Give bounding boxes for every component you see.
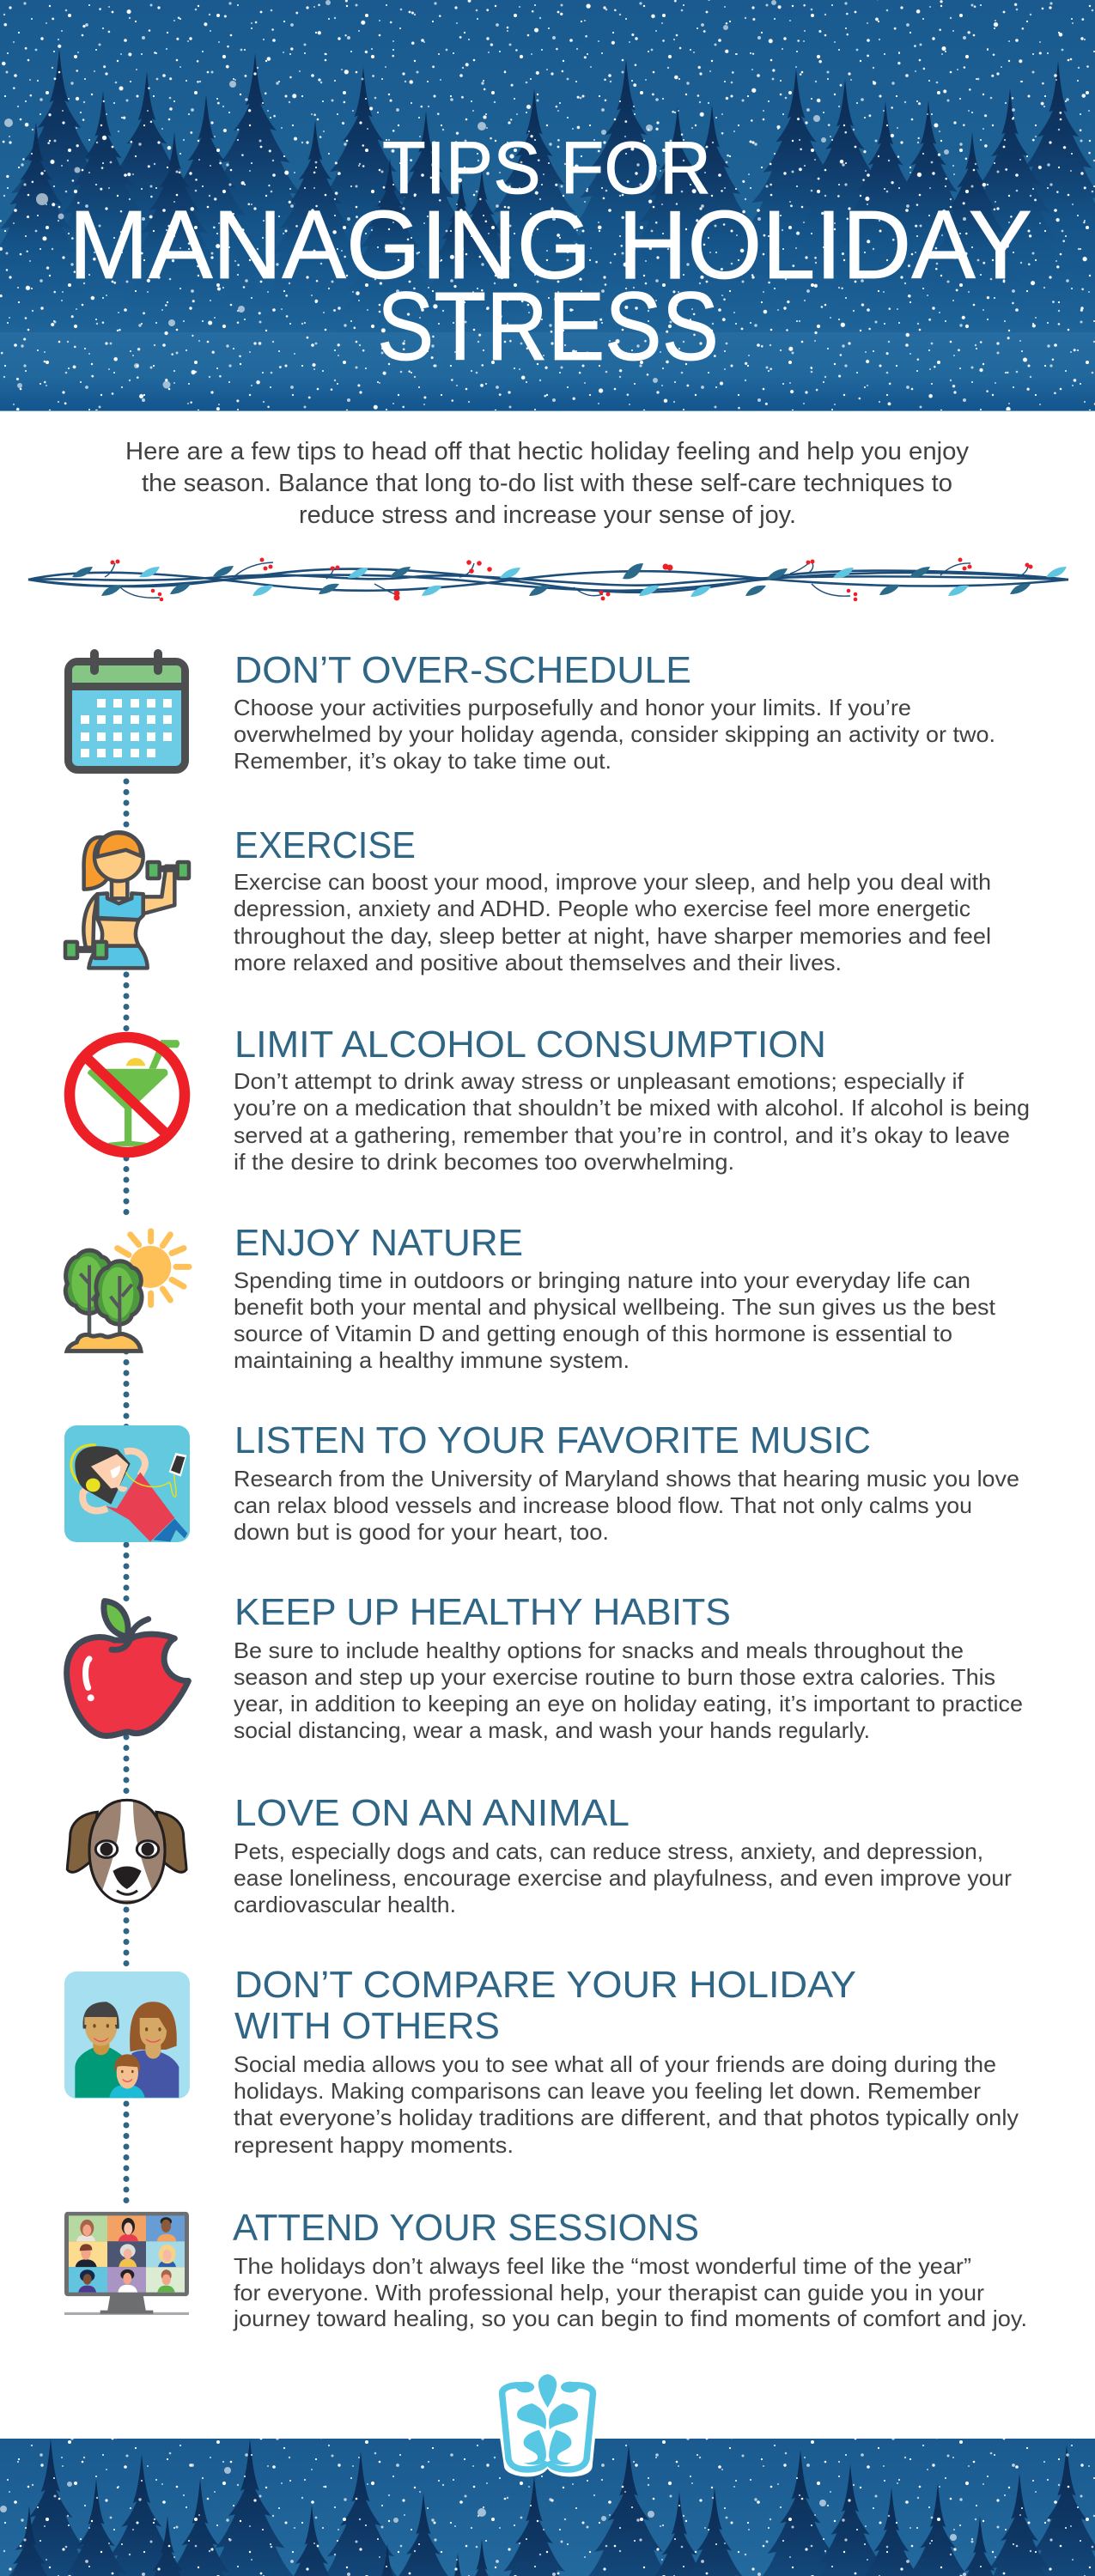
- icon: exercise woman: [65, 832, 189, 968]
- icon: woman listening to music: [64, 1425, 190, 1542]
- body text: social distancing, wear a mask, and wash your hands regularly.: [234, 1717, 870, 1743]
- body text: [234, 2051, 1019, 2158]
- body text: down but is good for your heart, too.: [234, 1519, 609, 1545]
- tip 8 text: [234, 1965, 1019, 2158]
- logo: [500, 2374, 595, 2476]
- body text: served at a gathering, remember that you’re in control, and it’s okay to leave: [234, 1122, 1010, 1148]
- body text: Exercise can boost your mood, improve your sleep, and help you deal with: [234, 869, 991, 895]
- body text: journey toward healing, so you can begin to find moments of comfort and joy.: [233, 2306, 1027, 2331]
- heading: DON’T COMPARE YOUR HOLIDAY: [234, 1965, 856, 2006]
- title: STRESS: [377, 272, 719, 380]
- body text: overwhelmed by your holiday agenda, consider skipping an activity or two.: [234, 721, 995, 747]
- body text: [234, 1637, 1023, 1743]
- tip 6 text: [234, 1592, 1023, 1743]
- heading: WITH OTHERS: [234, 2006, 500, 2047]
- body text: if the desire to drink becomes too overwhelming.: [234, 1149, 734, 1175]
- body text: [234, 1466, 1019, 1545]
- tip 5 text: [234, 1420, 1019, 1545]
- body text: ease loneliness, encourage exercise and playfulness, and even improve your: [234, 1865, 1012, 1891]
- tip 2 text: [234, 825, 991, 975]
- heading: LIMIT ALCOHOL CONSUMPTION: [234, 1024, 826, 1066]
- body text: Spending time in outdoors or bringing nature into your everyday life can: [234, 1267, 970, 1293]
- body text: throughout the day, sleep better at night, have sharper memories and feel: [234, 923, 991, 949]
- dotted connector: [124, 781, 129, 2211]
- icon: dog: [67, 1800, 186, 1903]
- heading: DON’T OVER-SCHEDULE: [234, 650, 691, 691]
- body text: [233, 2253, 1027, 2331]
- garland divider: [28, 558, 1068, 601]
- icon: calendar: [69, 649, 186, 769]
- tip 9 text: [233, 2208, 1027, 2331]
- icon: video call monitor: [64, 2212, 189, 2315]
- intro text: Here are a few tips to head off that hectic holiday feeling and help you enjoy: [125, 438, 969, 465]
- body text: that everyone’s holiday traditions are different, and that photos typically only: [234, 2105, 1019, 2130]
- body text: source of Vitamin D and getting enough of this hormone is essential to: [234, 1321, 952, 1346]
- title: MANAGING HOLIDAY: [69, 191, 1032, 299]
- body text: Pets, especially dogs and cats, can reduce stress, anxiety, and depression,: [234, 1838, 983, 1864]
- body text: Choose your activities purposefully and honor your limits. If you’re: [234, 695, 911, 720]
- heading: ATTEND YOUR SESSIONS: [233, 2208, 699, 2249]
- body text: benefit both your mental and physical wellbeing. The sun gives us the best: [234, 1294, 996, 1320]
- body text: more relaxed and positive about themselves and their lives.: [234, 950, 842, 975]
- intro text: [125, 438, 969, 529]
- title: [69, 127, 1032, 380]
- body text: you’re on a medication that shouldn’t be mixed with alcohol. If alcohol is being: [234, 1095, 1030, 1121]
- body text: [234, 695, 995, 774]
- body text: for everyone. With professional help, your therapist can guide you in your: [234, 2280, 984, 2306]
- body text: The holidays don’t always feel like the “most wonderful time of the year”: [234, 2253, 971, 2279]
- tip 7 text: [234, 1793, 1012, 1917]
- heading: LISTEN TO YOUR FAVORITE MUSIC: [234, 1420, 871, 1461]
- heading: LOVE ON AN ANIMAL: [234, 1793, 630, 1834]
- intro text: the season. Balance that long to-do list with these self-care techniques to: [142, 470, 952, 497]
- tip 4 text: [234, 1223, 996, 1373]
- body text: [234, 869, 991, 975]
- body text: Social media allows you to see what all of your friends are doing during the: [234, 2051, 996, 2077]
- body text: holidays. Making comparisons can leave you feeling let down. Remember: [234, 2078, 981, 2104]
- body text: cardiovascular health.: [234, 1892, 456, 1917]
- header banner: [0, 0, 1095, 411]
- heading: KEEP UP HEALTHY HABITS: [234, 1592, 731, 1633]
- heading: ENJOY NATURE: [234, 1223, 523, 1264]
- icon: no alcohol: [70, 1037, 185, 1152]
- body text: season and step up your exercise routine to burn those extra calories. This: [234, 1664, 995, 1690]
- body text: depression, anxiety and ADHD. People who exercise feel more energetic: [234, 896, 970, 921]
- body text: Research from the University of Maryland shows that hearing music you love: [234, 1466, 1019, 1492]
- body text: Remember, it’s okay to take time out.: [234, 748, 611, 774]
- body text: maintaining a healthy immune system.: [234, 1347, 630, 1373]
- title: TIPS FOR: [382, 127, 711, 210]
- body text: represent happy moments.: [234, 2132, 514, 2158]
- icon: apple: [67, 1601, 188, 1736]
- icon: family: [64, 1971, 190, 2099]
- intro text: reduce stress and increase your sense of joy.: [299, 501, 796, 529]
- body text: Don’t attempt to drink away stress or unpleasant emotions; especially if: [234, 1068, 964, 1094]
- footer banner: [0, 2439, 1095, 2576]
- body text: [234, 1068, 1030, 1175]
- body text: Be sure to include healthy options for snacks and meals throughout the: [234, 1637, 964, 1663]
- body text: can relax blood vessels and increase blood flow. That not only calms you: [234, 1492, 972, 1518]
- body text: [234, 1838, 1012, 1917]
- tip 1 text: [234, 650, 995, 774]
- body text: year, in addition to keeping an eye on holiday eating, it’s important to practice: [234, 1691, 1023, 1716]
- heading: EXERCISE: [234, 825, 416, 866]
- tip 3 text: [234, 1024, 1030, 1175]
- heading: [234, 1965, 856, 2047]
- body text: [234, 1267, 996, 1373]
- icon: trees and sun: [65, 1231, 189, 1351]
